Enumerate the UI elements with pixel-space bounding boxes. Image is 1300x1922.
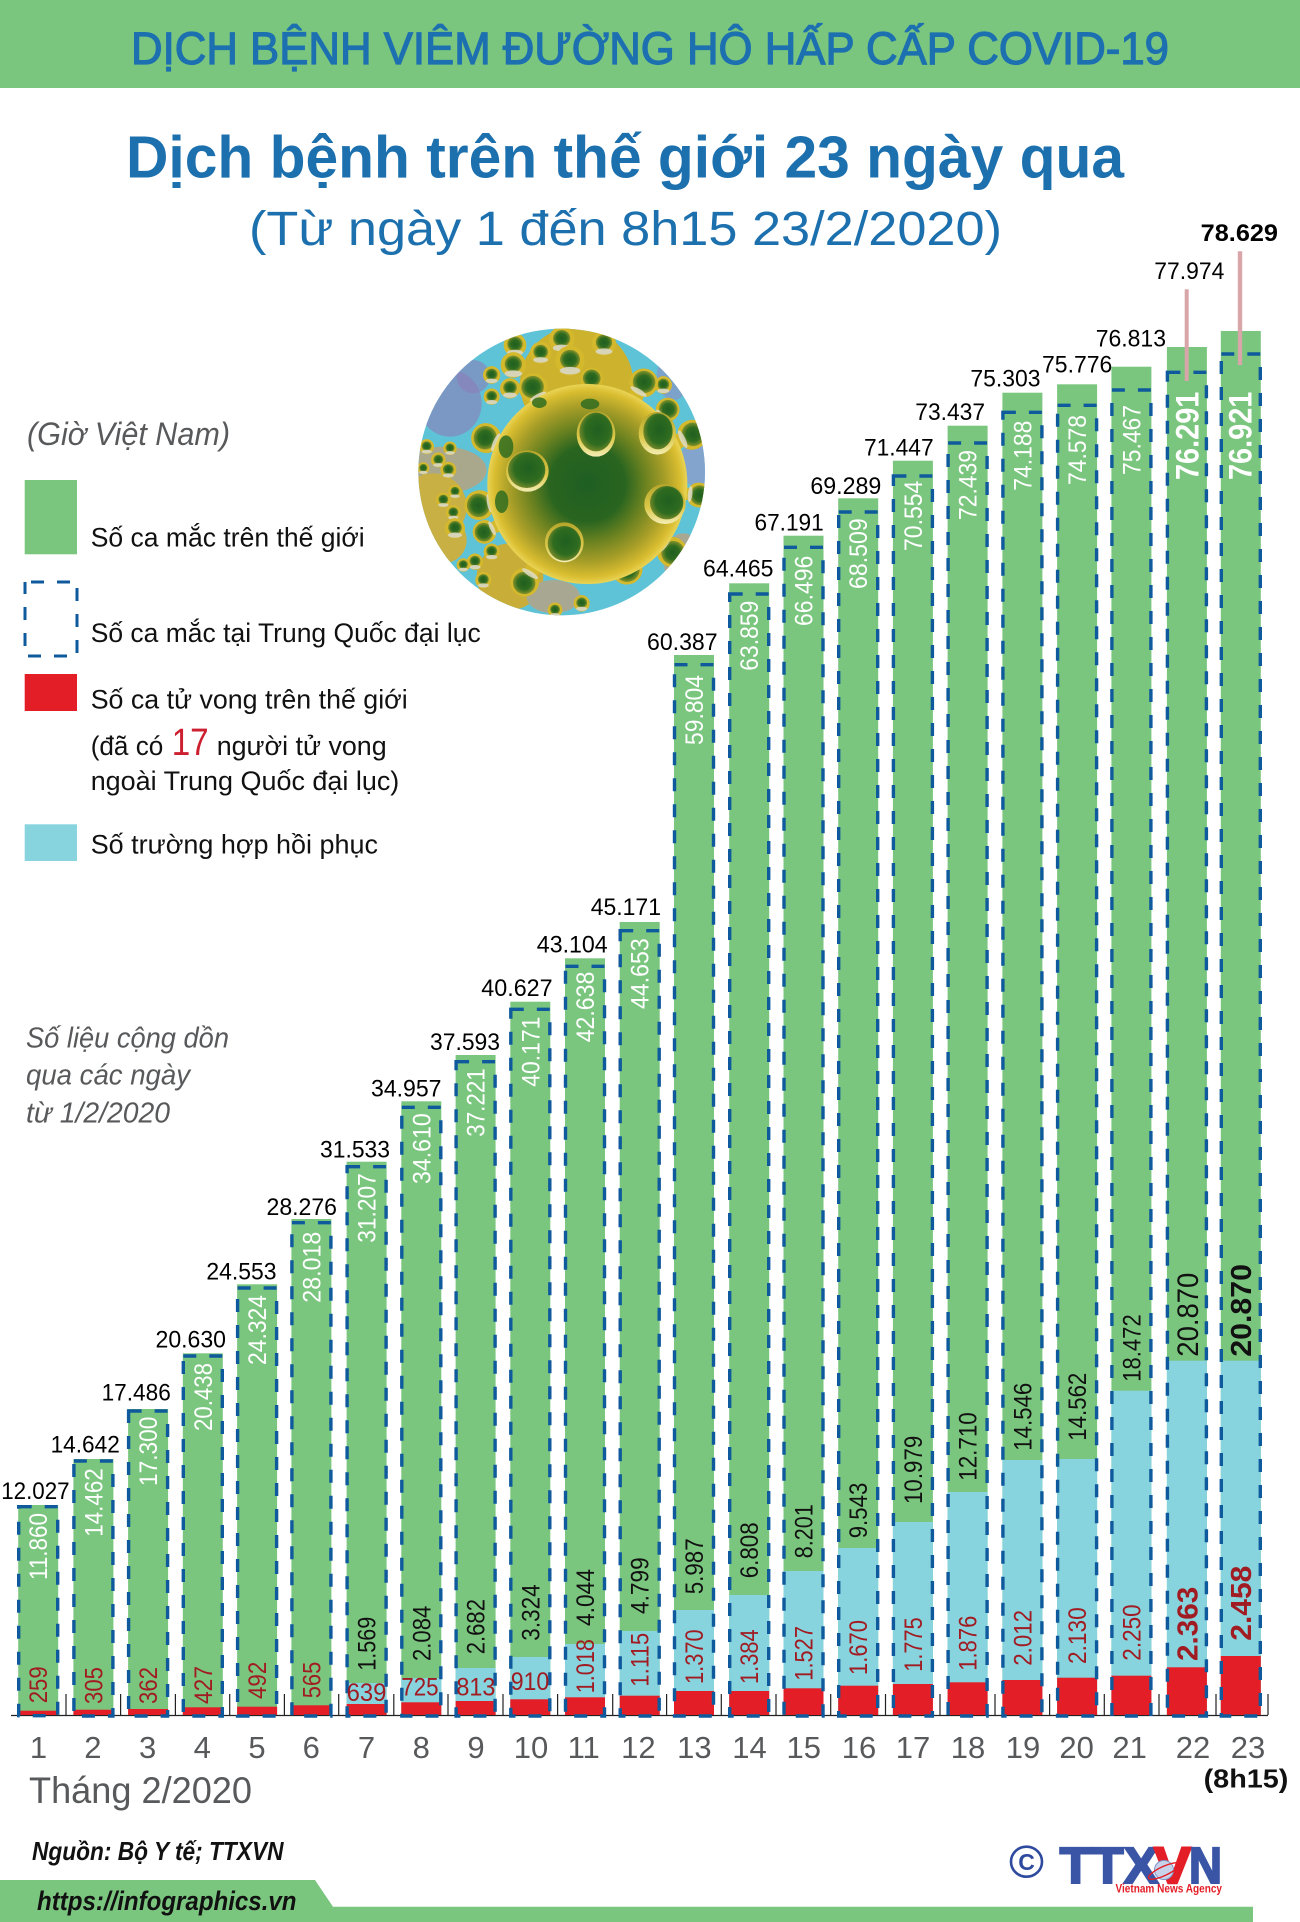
bar day 22: 76.291 bbox=[1169, 392, 1205, 480]
x axis day labels: 10 bbox=[514, 1730, 548, 1765]
x axis day labels: 9 bbox=[467, 1730, 485, 1765]
x axis day labels: 21 bbox=[1112, 1730, 1147, 1765]
x axis day labels: 17 bbox=[896, 1730, 930, 1765]
bar day 7: 31.207 bbox=[354, 1173, 382, 1243]
x axis day labels: 20 bbox=[1059, 1730, 1094, 1765]
x axis day labels: 23 bbox=[1231, 1730, 1265, 1765]
bar day 22: 2.363 bbox=[1172, 1587, 1204, 1661]
bar day 19: 2.012 bbox=[1009, 1610, 1037, 1666]
bar day 19: 14.546 bbox=[1009, 1383, 1037, 1451]
bar day 4 bbox=[156, 1326, 226, 1716]
bar day 15: 66.496 bbox=[790, 556, 818, 626]
bar day 10: 910 bbox=[511, 1668, 549, 1696]
bar day 7: 639 bbox=[347, 1679, 386, 1707]
bar day 1: 12.027 bbox=[1, 1478, 70, 1505]
bar day 14: 63.859 bbox=[736, 601, 764, 671]
cumulative note: Số liệu cộng dồn bbox=[26, 1022, 229, 1054]
bar day 19 bbox=[970, 366, 1042, 1716]
header band: DỊCH BỆNH VIÊM ĐƯỜNG HÔ HẤP CẤP COVID-19 bbox=[131, 23, 1169, 74]
bar day 13: 59.804 bbox=[681, 675, 709, 745]
bar day 11: 4.044 bbox=[572, 1569, 600, 1626]
legend: world deaths bbox=[25, 674, 408, 796]
legend: world deaths: Số ca tử vong trên thế giới bbox=[91, 684, 408, 714]
logo: TTXVN: TTX bbox=[1060, 1837, 1159, 1894]
bar day 7: 1.569 bbox=[354, 1617, 382, 1671]
bar day 18: 12.710 bbox=[955, 1412, 983, 1481]
logo: TTXVN bbox=[1011, 1837, 1223, 1896]
bar day 21: 75.467 bbox=[1118, 405, 1146, 475]
legend bbox=[25, 480, 481, 861]
bar day 18: 1.876 bbox=[955, 1616, 983, 1671]
x axis day labels: 14 bbox=[732, 1730, 767, 1765]
header band bbox=[0, 0, 1300, 88]
x axis day labels: 11 bbox=[568, 1730, 600, 1765]
bar day 13: 5.987 bbox=[681, 1538, 709, 1594]
legend: world cases: Số ca mắc trên thế giới bbox=[91, 522, 365, 553]
bar day 18: 73.437 bbox=[915, 399, 985, 426]
bar day 10: 40.171 bbox=[517, 1017, 545, 1087]
bar day 9: 37.221 bbox=[463, 1068, 491, 1137]
bar day 21: 18.472 bbox=[1118, 1314, 1146, 1382]
bar day 23 bbox=[1201, 220, 1278, 1716]
bar day 18 bbox=[915, 399, 988, 1716]
bar day 15 bbox=[754, 510, 824, 1716]
bar day 12: 1.115 bbox=[627, 1633, 655, 1687]
bar day 12 bbox=[591, 894, 661, 1716]
x axis day labels: 3 bbox=[139, 1730, 156, 1765]
bar day 11 bbox=[537, 931, 608, 1716]
cumulative note bbox=[26, 1022, 229, 1129]
bar day 9: 2.682 bbox=[463, 1599, 491, 1654]
bar day 20 bbox=[1042, 351, 1112, 1716]
x axis day labels: 8 bbox=[413, 1730, 430, 1765]
bar day 21: 2.250 bbox=[1118, 1604, 1146, 1661]
x axis line and ticks bbox=[11, 1694, 1268, 1716]
bar day 1: 11.860 bbox=[25, 1513, 53, 1580]
bar day 9: 37.593 bbox=[430, 1029, 500, 1056]
bar day 14: 64.465 bbox=[703, 556, 774, 583]
x axis day labels: 4 bbox=[194, 1730, 211, 1765]
bar day 14: 1.384 bbox=[736, 1629, 764, 1684]
bar day 10: 40.627 bbox=[481, 975, 553, 1002]
x axis day labels bbox=[30, 1730, 1265, 1765]
bar day 16: 69.289 bbox=[810, 473, 881, 500]
bar day 2 bbox=[51, 1432, 120, 1716]
logo: TTXVN: V bbox=[1154, 1837, 1191, 1894]
bar day 22: 77.974 bbox=[1154, 258, 1224, 285]
bar day 5: 24.553 bbox=[206, 1258, 276, 1285]
subtitle: (Từ ngày 1 đến 8h15 23/2/2020) bbox=[249, 203, 1002, 256]
x axis day labels: 5 bbox=[248, 1730, 266, 1765]
x axis day labels: 12 bbox=[621, 1730, 656, 1765]
bar day 23: 76.921 bbox=[1223, 392, 1259, 480]
bar day 10: 3.324 bbox=[517, 1584, 545, 1641]
time note for day 23: (8h15) bbox=[1204, 1764, 1288, 1794]
logo: TTXVN: C bbox=[1018, 1849, 1035, 1875]
x axis day labels: 22 bbox=[1176, 1730, 1210, 1765]
bar day 11: 42.638 bbox=[572, 972, 600, 1042]
bar day 22: 20.870 bbox=[1172, 1273, 1205, 1357]
bar day 17: 1.775 bbox=[900, 1617, 928, 1672]
bar day 3 bbox=[102, 1380, 171, 1716]
bar day 21 bbox=[1096, 326, 1166, 1716]
x axis day labels: 2 bbox=[84, 1730, 102, 1765]
bar day 12: 45.171 bbox=[591, 894, 661, 921]
time zone note: (Giờ Việt Nam) bbox=[27, 416, 230, 452]
bar day 8 bbox=[371, 1076, 442, 1716]
x axis day labels: 18 bbox=[951, 1730, 985, 1765]
bar day 13: 60.387 bbox=[647, 629, 718, 656]
legend: world deaths: (đã có bbox=[91, 731, 163, 761]
bar day 4: 20.438 bbox=[190, 1363, 218, 1431]
bar day 11: 43.104 bbox=[537, 931, 608, 958]
bar day 7: 31.533 bbox=[320, 1136, 390, 1163]
bar day 7 bbox=[320, 1136, 390, 1716]
legend: recoveries: Số trường hợp hồi phục bbox=[91, 829, 378, 859]
bar day 6: 28.276 bbox=[266, 1194, 337, 1221]
bar day 8: 34.957 bbox=[371, 1076, 442, 1103]
footer band bbox=[0, 1880, 1253, 1922]
bar day 4: 427 bbox=[190, 1666, 218, 1704]
bar day 5: 24.324 bbox=[244, 1295, 272, 1365]
bar day 15: 8.201 bbox=[790, 1504, 818, 1558]
legend: mainland China cases bbox=[25, 582, 481, 656]
bar day 16: 9.543 bbox=[845, 1483, 873, 1538]
cumulative note: từ 1/2/2020 bbox=[26, 1097, 170, 1129]
bar day 17: 10.979 bbox=[900, 1436, 928, 1504]
source: Nguồn: Bộ Y tế; TTXVN bbox=[32, 1836, 285, 1866]
bar day 20: 75.776 bbox=[1042, 351, 1112, 378]
bar day 19: 75.303 bbox=[970, 366, 1040, 393]
bar day 12: 4.799 bbox=[627, 1557, 655, 1614]
logo: TTXVN: N bbox=[1189, 1837, 1222, 1894]
bar day 2: 14.462 bbox=[80, 1468, 108, 1537]
x axis day labels: 6 bbox=[303, 1730, 320, 1765]
legend: world deaths: 17 bbox=[172, 722, 209, 764]
x axis day labels: 13 bbox=[677, 1730, 712, 1765]
bar day 16: 1.670 bbox=[845, 1620, 873, 1675]
bar day 1 bbox=[1, 1478, 70, 1716]
bar day 18: 72.439 bbox=[955, 450, 983, 520]
website url: https://infographics.vn bbox=[37, 1886, 296, 1916]
x axis day labels: 1 bbox=[30, 1730, 47, 1765]
bar day 10 bbox=[481, 975, 553, 1716]
bar day 9 bbox=[430, 1029, 500, 1716]
bar day 6 bbox=[266, 1194, 337, 1716]
bar day 3: 17.486 bbox=[102, 1380, 171, 1407]
bar day 11: 1.018 bbox=[572, 1639, 600, 1693]
bar day 23: 78.629 bbox=[1201, 220, 1278, 247]
x axis day labels: 16 bbox=[842, 1730, 876, 1765]
x axis day labels: 15 bbox=[787, 1730, 821, 1765]
bar day 20: 74.578 bbox=[1064, 415, 1092, 485]
title: Dịch bệnh trên thế giới 23 ngày qua bbox=[126, 124, 1125, 190]
bar day 6: 565 bbox=[298, 1662, 326, 1698]
bar day 13: 1.370 bbox=[681, 1629, 709, 1684]
bar day 5: 492 bbox=[244, 1662, 272, 1699]
bar day 9: 813 bbox=[456, 1674, 495, 1702]
bar day 8: 2.084 bbox=[408, 1606, 436, 1661]
bar day 14: 6.808 bbox=[736, 1522, 764, 1578]
bar day 4: 20.630 bbox=[156, 1326, 226, 1353]
bar day 15: 1.527 bbox=[790, 1626, 818, 1681]
bar day 21: 76.813 bbox=[1096, 326, 1166, 353]
bar day 23: 20.870 bbox=[1226, 1264, 1258, 1357]
bar day 3: 362 bbox=[135, 1667, 163, 1704]
x axis day labels: 7 bbox=[358, 1730, 375, 1765]
bar day 2: 305 bbox=[80, 1667, 108, 1704]
bar day 8: 34.610 bbox=[408, 1113, 436, 1184]
bar day 19: 74.188 bbox=[1009, 421, 1037, 491]
x axis title: Tháng 2/2020 bbox=[29, 1770, 252, 1811]
bar day 20: 14.562 bbox=[1064, 1373, 1092, 1441]
cumulative note: qua các ngày bbox=[26, 1059, 191, 1091]
bar day 1: 259 bbox=[25, 1666, 53, 1703]
bar day 5 bbox=[206, 1258, 277, 1716]
legend: mainland China cases: Số ca mắc tại Trung Quốc đại lục bbox=[91, 617, 481, 648]
legend: recoveries bbox=[25, 824, 378, 861]
bar day 8: 725 bbox=[401, 1674, 439, 1702]
illustration: coronavirus bbox=[418, 328, 705, 616]
bar day 17: 70.554 bbox=[900, 481, 928, 551]
bar day 17 bbox=[864, 434, 934, 1716]
bar day 15: 67.191 bbox=[754, 510, 824, 537]
legend: world deaths: ngoài Trung Quốc đại lục) bbox=[91, 766, 399, 796]
bar day 14 bbox=[703, 556, 774, 1716]
bar chart bbox=[1, 220, 1278, 1765]
bar day 6: 28.018 bbox=[298, 1232, 326, 1303]
bar day 3: 17.300 bbox=[135, 1417, 163, 1486]
bar day 16: 68.509 bbox=[845, 518, 873, 589]
bar day 13 bbox=[647, 629, 718, 1716]
bar day 17: 71.447 bbox=[864, 434, 934, 461]
bar day 22 bbox=[1154, 258, 1224, 1716]
x axis day labels: 19 bbox=[1006, 1730, 1040, 1765]
bar day 23: 2.458 bbox=[1226, 1566, 1258, 1641]
logo: TTXVN: Vietnam News Agency bbox=[1116, 1884, 1223, 1896]
legend: world cases bbox=[25, 480, 365, 554]
bar day 16 bbox=[810, 473, 881, 1716]
legend: world deaths: người tử vong bbox=[217, 731, 387, 761]
bar day 20: 2.130 bbox=[1064, 1607, 1092, 1664]
bar day 12: 44.653 bbox=[627, 938, 655, 1009]
bar day 2: 14.642 bbox=[51, 1432, 120, 1459]
